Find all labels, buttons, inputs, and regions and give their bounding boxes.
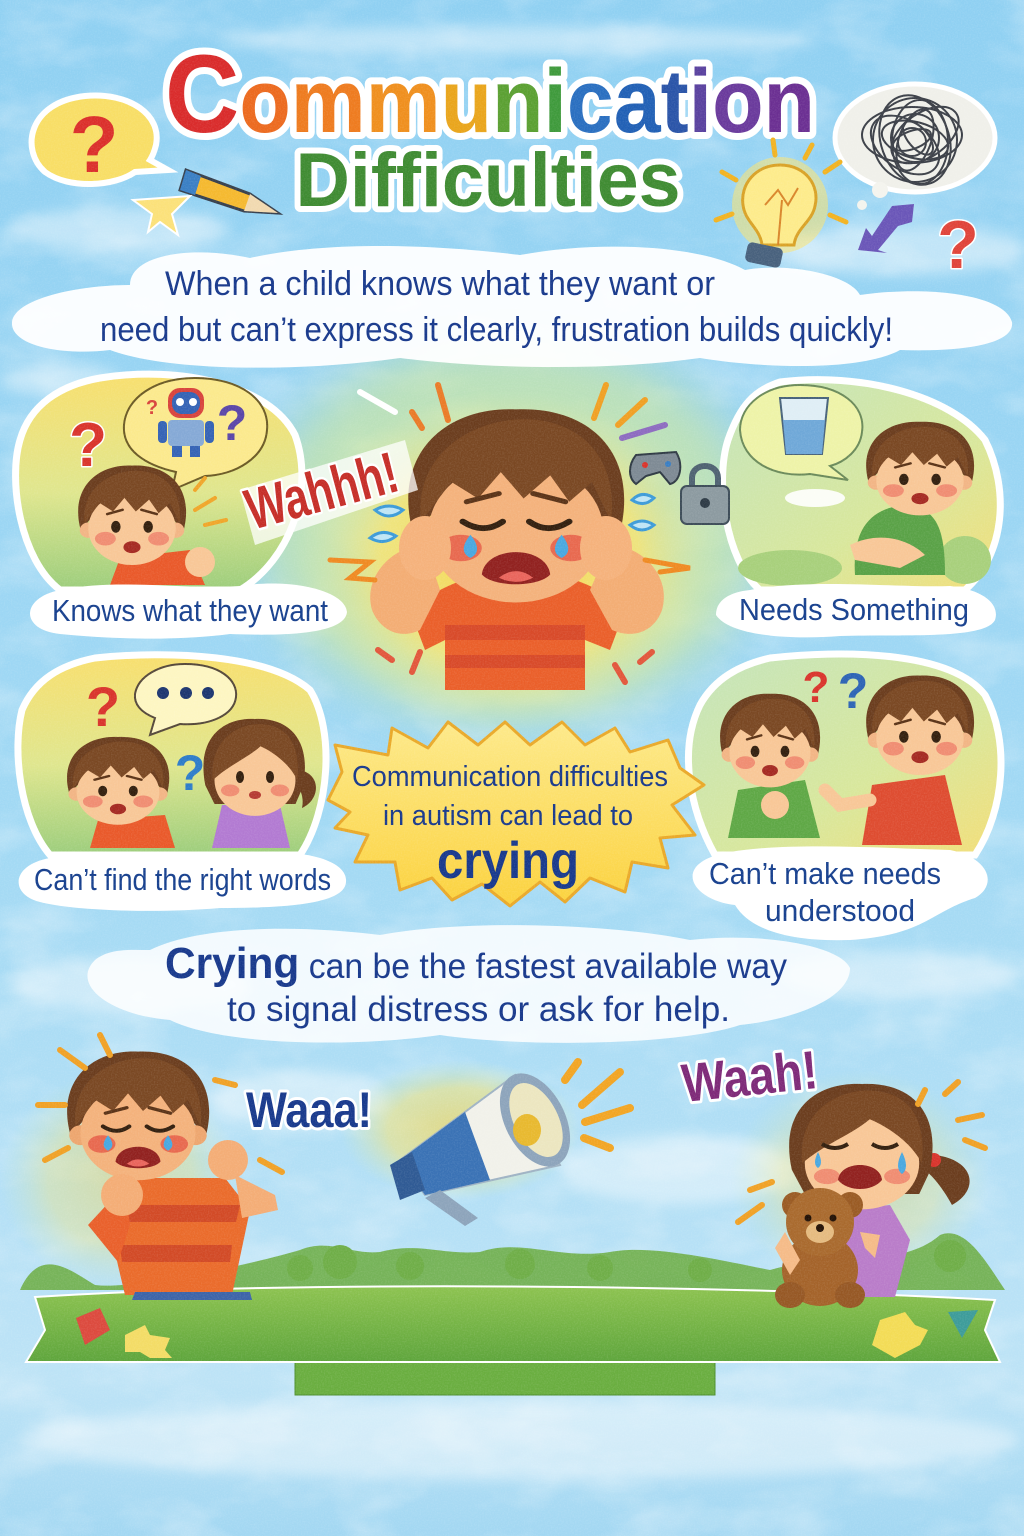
callout: starburst bbox=[328, 722, 704, 906]
label: can't find the right words: Can’t find the right words bbox=[34, 862, 331, 897]
question marks: ? bbox=[86, 675, 120, 738]
icon: toy pieces bbox=[76, 1308, 110, 1345]
child bbox=[78, 466, 226, 585]
intro cloud bbox=[12, 246, 1012, 368]
question marks bbox=[803, 663, 868, 719]
panel: knows what they want bbox=[16, 374, 302, 590]
icon: purple arrow bbox=[858, 204, 914, 253]
panel: can't find the right words bbox=[18, 655, 326, 855]
question marks: ? bbox=[175, 745, 205, 801]
child: girl bbox=[203, 719, 316, 848]
message line 2: to signal distress or ask for help. bbox=[227, 990, 730, 1029]
icon: puzzle piece right bbox=[872, 1312, 928, 1358]
bottom right crying girl with teddy bbox=[775, 1084, 970, 1308]
head bbox=[408, 409, 624, 602]
label: needs something bbox=[716, 584, 996, 637]
child: red shirt bbox=[825, 676, 974, 845]
bottom left crying child bbox=[67, 1051, 278, 1300]
child bbox=[850, 422, 974, 575]
label: can't find the right words bbox=[19, 852, 346, 911]
label: can't make needs understood: understood bbox=[765, 893, 915, 928]
panel: needs something bbox=[723, 380, 1000, 590]
icon: yellow arrow bbox=[133, 196, 190, 235]
motion marks around central child bbox=[330, 385, 690, 682]
speech bubble with robot: ? bbox=[146, 397, 158, 419]
icon: padlock bbox=[681, 466, 729, 524]
question marks: ? bbox=[803, 663, 829, 712]
title line 1: Communication: Communication bbox=[165, 33, 815, 156]
speech bubble with dots bbox=[135, 664, 236, 735]
callout: starburst: in autism can lead to bbox=[383, 800, 633, 832]
arms bbox=[370, 545, 440, 634]
icon: question speech bubble: ? bbox=[70, 100, 118, 189]
label: needs something: Needs Something bbox=[739, 592, 969, 627]
grass banner bbox=[26, 1286, 1000, 1395]
icon: megaphone bbox=[390, 1062, 630, 1226]
child: green shirt bbox=[720, 694, 820, 838]
icon: red question mark: ? bbox=[937, 207, 979, 283]
title bbox=[165, 33, 815, 223]
red question mark: ? bbox=[69, 411, 107, 480]
panel: can't make needs understood bbox=[688, 654, 1001, 855]
Waaa! exclamation: Waaa! bbox=[246, 1082, 372, 1138]
marks around right child bbox=[738, 1082, 985, 1222]
speech bubble with robot bbox=[124, 378, 267, 490]
Wahhh! exclamation: Wahhh! bbox=[239, 440, 405, 543]
icon: question speech bubble bbox=[32, 96, 168, 189]
intro text line 1: When a child knows what they want or bbox=[165, 265, 715, 303]
icon: pencil bbox=[180, 170, 278, 213]
label: knows what they want bbox=[30, 584, 347, 639]
central crying child bbox=[370, 409, 664, 690]
question marks: ? bbox=[838, 663, 868, 719]
intro text line 2: need but can’t express it clearly, frustration builds quickly! bbox=[100, 311, 893, 349]
speech bubble with robot: ? bbox=[217, 395, 247, 451]
icon: lightbulb bbox=[716, 140, 846, 269]
speech bubble with water glass bbox=[740, 385, 862, 480]
label: can't make needs understood bbox=[693, 846, 988, 940]
marks around left child bbox=[38, 1035, 282, 1172]
callout: starburst: Communication difficulties bbox=[352, 761, 668, 793]
icon: game controller bbox=[630, 452, 680, 484]
child: boy bbox=[67, 737, 175, 848]
hands bbox=[399, 516, 451, 580]
icon: tangled thought bubble bbox=[835, 84, 995, 210]
teddy bear bbox=[775, 1188, 880, 1308]
title line 2: Difficulties: Difficulties bbox=[296, 138, 680, 223]
shirt bbox=[410, 572, 625, 690]
icon: teal gem bbox=[948, 1310, 978, 1338]
question marks bbox=[86, 675, 205, 801]
bushes and small cloud bbox=[738, 489, 991, 586]
message line 1: Crying can be the fastest available way bbox=[165, 939, 787, 988]
callout: starburst: crying bbox=[437, 832, 579, 890]
label: knows what they want: Knows what they want bbox=[52, 593, 328, 628]
message cloud bbox=[87, 925, 850, 1043]
icon: puzzle piece left bbox=[125, 1325, 172, 1358]
Waah! exclamation: Waah! bbox=[679, 1040, 821, 1114]
bushes bbox=[20, 1233, 1005, 1290]
green-yellow wash behind the central child bbox=[260, 340, 760, 720]
label: can't make needs understood: Can’t make needs bbox=[709, 856, 941, 891]
